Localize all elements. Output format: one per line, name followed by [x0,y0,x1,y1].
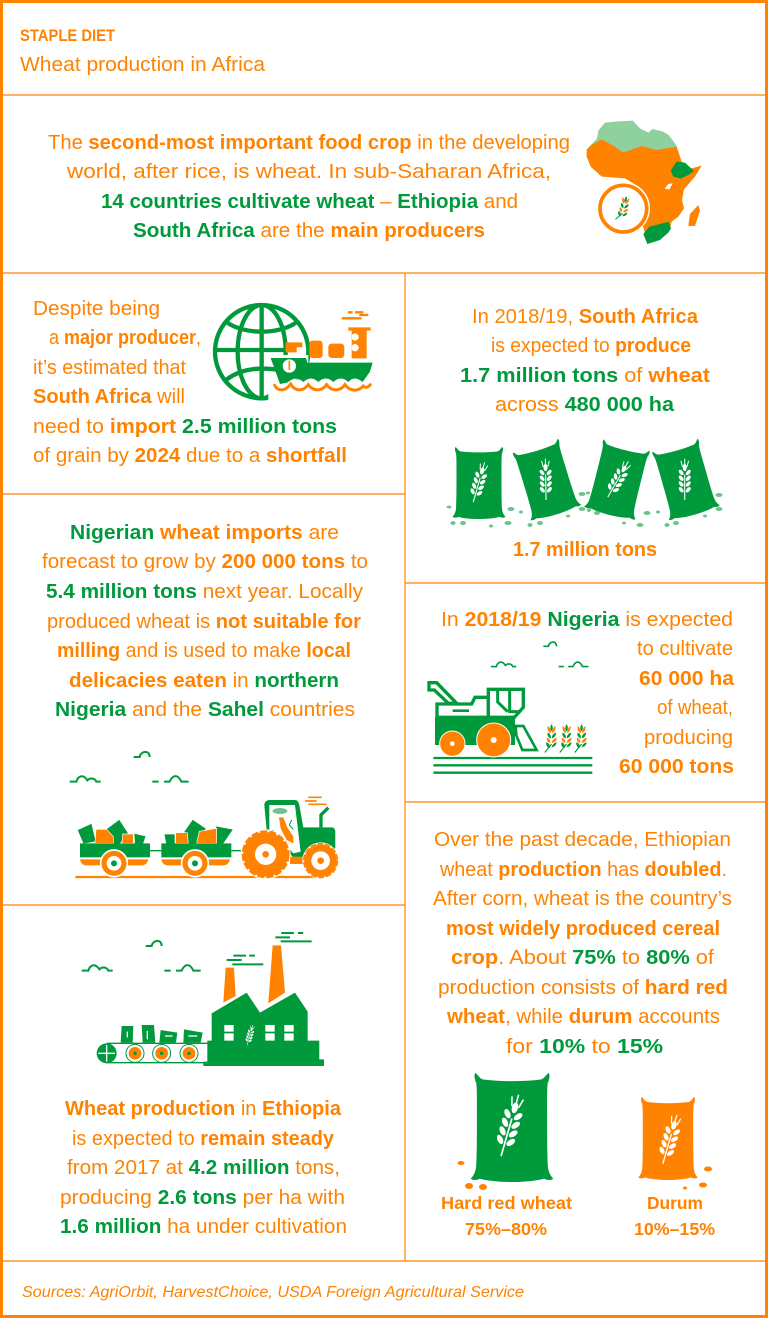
panel: South Africa production text [460,305,710,416]
panel: Ethiopia steady production text: is expected to remain steady [72,1127,335,1150]
panel: Nigeria cultivation text: producing [644,726,733,749]
panel: South Africa imports text: Despite being [33,297,160,320]
panel: Nigeria cultivation text: In 2018/19 Nigeria is expected [441,608,733,631]
label: hard red wheat [441,1193,572,1239]
title: Wheat production in Africa [20,53,266,76]
title [20,27,266,76]
panel: Ethiopian production text: Over the past decade, Ethiopian [434,828,731,851]
panel: intro text: The second-most important food crop in the developing [48,131,570,154]
icon: green sack, hard red wheat [458,1073,553,1190]
label: hard red wheat: Hard red wheat [441,1193,572,1213]
panel: Nigerian imports text: produced wheat is not suitable for [47,610,361,633]
icon: factory with conveyor [82,933,324,1066]
panel: intro text: world, after rice, is wheat. In sub-Saharan Africa, [66,160,551,183]
panel: Nigeria cultivation text: of wheat, [657,696,733,719]
panel: Nigerian imports text: Nigerian wheat imports are [70,521,339,544]
panel: Ethiopian production text: After corn, wheat is the country’s [433,887,732,910]
label: durum: 10%–15% [634,1219,715,1239]
panel: South Africa imports text: South Africa will [33,385,185,408]
icon: tractor with wheat trailers [70,752,339,879]
panel: Ethiopian production text: crop. About 75% to 80% of [451,946,714,969]
panel: South Africa production text: is expected to produce [491,334,691,357]
panel: Ethiopian production text: most widely produced cereal [446,917,720,940]
icon: four wheat sacks [446,438,722,528]
panel: Ethiopia steady production text: 1.6 million ha under cultivation [60,1215,347,1238]
panel: Ethiopian production text: production consists of hard red [438,976,728,999]
panel: Ethiopian production text: wheat, while durum accounts [446,1005,720,1028]
panel: Nigerian imports text: delicacies eaten in northern [69,669,339,692]
panel: Ethiopia steady production text: producing 2.6 tons per ha with [60,1186,345,1209]
icon: combine harvester [429,642,592,773]
panel: Nigeria cultivation text: to cultivate [637,637,733,660]
panel: Nigerian imports text [42,521,368,721]
icon: map of Africa [587,121,702,244]
icon: orange sack, durum [638,1097,712,1190]
panel: Nigeria cultivation text: 60 000 tons [619,755,734,778]
panel: Ethiopian production text: wheat production has doubled. [439,858,727,881]
panel: Ethiopia steady production text: Wheat production in Ethiopia [65,1097,342,1120]
panel: South Africa imports text: need to import 2.5 million tons [33,415,337,438]
label: durum [634,1193,715,1239]
panel: intro text: 14 countries cultivate wheat – Ethiopia and [101,190,518,213]
sacks caption: 1.7 million tons [513,538,657,561]
panel: Ethiopia steady production text: from 2017 at 4.2 million tons, [67,1156,340,1179]
label: durum: Durum [647,1193,703,1213]
title: STAPLE DIET [20,27,115,45]
panel: South Africa imports text: a major producer, [49,326,201,349]
panel: Ethiopian production text: for 10% to 15% [506,1035,663,1058]
label: hard red wheat: 75%–80% [465,1219,547,1239]
panel: Nigerian imports text: forecast to grow by 200 000 tons to [42,550,368,573]
panel: South Africa production text: across 480 000 ha [495,393,675,416]
icon: globe and cargo ship [215,305,377,400]
panel: South Africa imports text [33,297,347,467]
panel: South Africa imports text: of grain by 2024 due to a shortfall [33,444,347,467]
panel: Nigeria cultivation text: 60 000 ha [639,667,735,690]
panel: intro text: South Africa are the main producers [133,219,485,242]
panel: South Africa production text: 1.7 million tons of wheat [460,364,710,387]
sources: Sources: AgriOrbit, HarvestChoice, USDA Foreign Agricultural Service [22,1284,524,1301]
panel: intro text [48,131,570,242]
panel: South Africa imports text: it’s estimated that [33,356,186,379]
panel: Nigeria cultivation text [441,608,735,778]
panel: Nigerian imports text: 5.4 million tons next year. Locally [46,580,364,603]
panel: South Africa production text: In 2018/19, South Africa [472,305,699,328]
panel: Ethiopia steady production text [60,1097,347,1238]
panel: Ethiopian production text [433,828,732,1058]
panel: Nigerian imports text: Nigeria and the Sahel countries [55,698,355,721]
panel: Nigerian imports text: milling and is used to make local [57,639,351,662]
